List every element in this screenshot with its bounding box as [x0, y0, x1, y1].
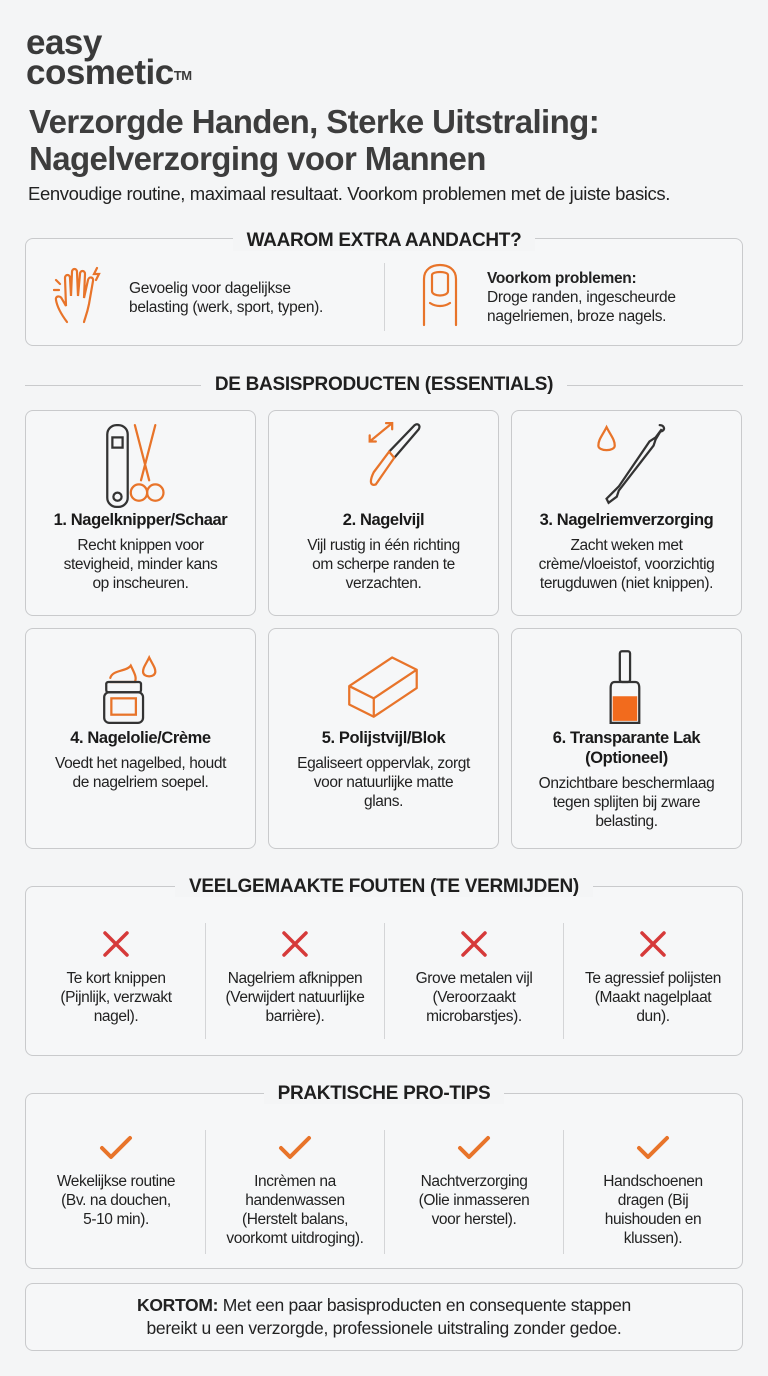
- mistake 3: Grove metalen vijl: [416, 970, 532, 987]
- kortom box: KORTOM: Met een paar basisproducten en consequente stappen: [137, 1295, 631, 1315]
- mistake 2: barrière).: [266, 1008, 324, 1025]
- body: voor natuurlijke matte: [314, 774, 453, 791]
- heading: pro-tips: PRAKTISCHE PRO-TIPS: [278, 1083, 490, 1104]
- icon: hand: [53, 266, 101, 324]
- logo: easy: [26, 23, 102, 62]
- body: de nagelriem soepel.: [73, 774, 208, 791]
- body: Egaliseert oppervlak, zorgt: [297, 755, 470, 772]
- tip 2: (Herstelt balans,: [242, 1211, 348, 1228]
- panel: pro-tips: [25, 1093, 743, 1269]
- title: 6. Transparante Lak: [553, 729, 700, 747]
- mistake 3: microbarstjes).: [426, 1008, 522, 1025]
- tip 4: Handschoenen: [603, 1173, 703, 1190]
- mistake 4: Te agressief polijsten: [585, 970, 721, 987]
- tip 1: Wekelijkse routine: [57, 1173, 175, 1190]
- title: Verzorgde Handen, Sterke Uitstraling:: [29, 103, 599, 140]
- body: [55, 755, 226, 791]
- tip 2: [226, 1136, 364, 1247]
- heading: basisproducten: [25, 385, 743, 386]
- body: [64, 537, 218, 592]
- card 6: [511, 628, 742, 849]
- subtitle: Eenvoudige routine, maximaal resultaat. Voorkom problemen met de juiste basics.: [28, 183, 670, 204]
- body: terugduwen (niet knippen).: [540, 575, 713, 592]
- mistake 3: (Veroorzaakt: [432, 989, 516, 1006]
- title: (Optioneel): [585, 749, 668, 767]
- mistake 1: nagel).: [94, 1008, 138, 1025]
- mistake 1: Te kort knippen: [66, 970, 166, 987]
- tip 3: (Olie inmasseren: [419, 1192, 529, 1209]
- kortom box: [25, 1283, 743, 1351]
- text: gevoelig: [129, 280, 323, 316]
- panel: waarom extra aandacht: [25, 238, 743, 346]
- text: gevoelig: belasting (werk, sport, typen).: [129, 299, 323, 316]
- card 5: [268, 628, 499, 849]
- icon: nail: [422, 264, 458, 326]
- tip 3: voor herstel).: [432, 1211, 516, 1228]
- title: 3. Nagelriemverzorging: [540, 511, 713, 529]
- body: glans.: [364, 793, 403, 810]
- tip 3: Nachtverzorging: [421, 1173, 527, 1190]
- tip 4: huishouden en: [605, 1211, 701, 1228]
- heading: waarom: WAAROM EXTRA AANDACHT?: [247, 230, 521, 251]
- body: [297, 755, 470, 810]
- icon: drop & pusher: [597, 424, 666, 504]
- mistake 1: (Pijnlijk, verzwakt: [60, 989, 172, 1006]
- body: Zacht weken met: [570, 537, 683, 554]
- mistake 3: [416, 931, 532, 1025]
- mistake 4: [585, 931, 721, 1025]
- mistake 4: dun).: [636, 1008, 670, 1025]
- body: tegen splijten bij zware: [553, 794, 700, 811]
- kortom box: bereikt u een verzorgde, professionele uitstraling zonder gedoe.: [146, 1318, 622, 1338]
- heading: fouten: VEELGEMAAKTE FOUTEN (TE VERMIJDEN): [189, 876, 579, 897]
- card 2: [268, 410, 499, 616]
- mistake 2: Nagelriem afknippen: [228, 970, 362, 987]
- tip 2: Incrèmen na: [254, 1173, 336, 1190]
- title: Nagelverzorging voor Mannen: [29, 140, 486, 177]
- icon: buffer block: [348, 656, 418, 718]
- body: [539, 775, 714, 830]
- tip 2: handenwassen: [245, 1192, 345, 1209]
- tip 1: 5-10 min).: [83, 1211, 149, 1228]
- body: verzachten.: [346, 575, 421, 592]
- body: crème/vloeistof, voorzichtig: [539, 556, 714, 573]
- text: DE BASISPRODUCTEN (ESSENTIALS): [215, 374, 553, 395]
- body: [539, 537, 714, 592]
- card 3: [511, 410, 742, 616]
- body: Voedt het nagelbed, houdt: [55, 755, 226, 772]
- body: Vijl rustig in één richting: [307, 537, 460, 554]
- icon: nail polish: [610, 650, 640, 724]
- title: [553, 729, 700, 767]
- tip 3: [419, 1136, 529, 1228]
- body: op inscheuren.: [92, 575, 189, 592]
- mistake 2: [226, 931, 364, 1025]
- body: stevigheid, minder kans: [64, 556, 217, 573]
- tip 4: klussen).: [624, 1230, 682, 1247]
- card 4: [25, 628, 256, 849]
- icon: clipper & scissors: [106, 424, 165, 508]
- mistake 2: (Verwijdert natuurlijke: [226, 989, 364, 1006]
- tip 4: dragen (Bij: [618, 1192, 688, 1209]
- title: 4. Nagelolie/Crème: [70, 729, 211, 747]
- tip 4: [603, 1136, 703, 1247]
- tip 1: (Bv. na douchen,: [61, 1192, 171, 1209]
- icon: cream jar: [103, 655, 156, 724]
- text: voorkom problemen: nagelriemen, broze nagels.: [487, 308, 666, 325]
- tip 2: voorkomt uitdroging).: [226, 1230, 364, 1247]
- icon: nail file: [368, 422, 421, 486]
- title: 1. Nagelknipper/Schaar: [54, 511, 227, 529]
- body: belasting.: [595, 813, 658, 830]
- text: voorkom problemen: Droge randen, ingescheurde: [487, 289, 676, 306]
- body: Onzichtbare beschermlaag: [539, 775, 714, 792]
- body: Recht knippen voor: [77, 537, 204, 554]
- body: [307, 537, 460, 592]
- tip 1: [57, 1136, 175, 1228]
- panel: fouten: [25, 886, 743, 1056]
- title: 5. Polijstvijl/Blok: [322, 729, 445, 747]
- text: voorkom problemen: Voorkom problemen:: [487, 270, 636, 287]
- logo: [26, 23, 192, 92]
- mistake 1: [60, 931, 172, 1025]
- logo: cosmeticTM: [26, 53, 192, 92]
- body: om scherpe randen te: [312, 556, 455, 573]
- text: gevoelig: Gevoelig voor dagelijkse: [129, 280, 291, 297]
- card 1: [25, 410, 256, 616]
- title: [29, 103, 599, 177]
- mistake 4: (Maakt nagelplaat: [595, 989, 711, 1006]
- text: voorkom problemen: [487, 270, 676, 325]
- title: 2. Nagelvijl: [343, 511, 424, 529]
